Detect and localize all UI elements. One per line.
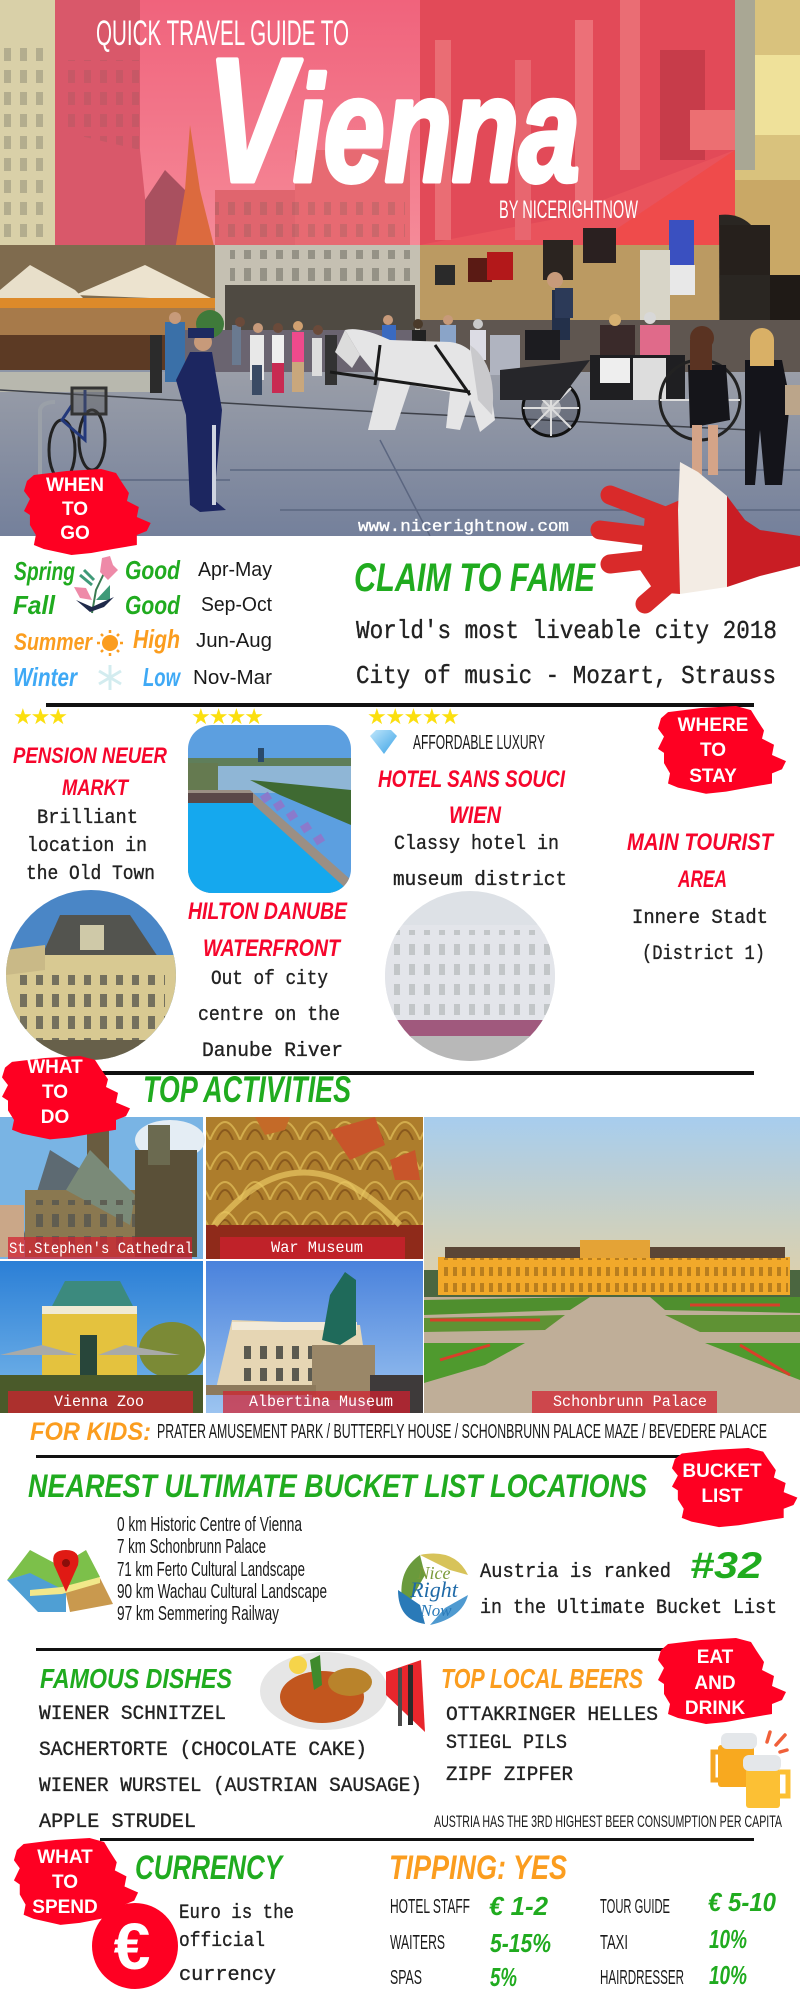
season: winter: Nov-Mar — [193, 667, 272, 689]
season: summer: Summer — [14, 629, 93, 656]
hotel: sans souci: WIEN — [449, 802, 502, 829]
hotel: sans souci: HOTEL SANS SOUCI — [378, 766, 566, 793]
badge: what to do: WHAT — [27, 1057, 83, 1078]
season: winter — [13, 662, 272, 692]
icon: euro coin — [92, 1903, 178, 1989]
title: Vienna: Vienna — [207, 23, 580, 219]
badge: bucket list: BUCKET — [682, 1461, 762, 1482]
panel: claim to fame — [354, 556, 777, 691]
hotel: hilton danube waterfront: Danube River — [202, 1040, 343, 1063]
panel: currency: CURRENCY — [135, 1849, 285, 1887]
hero photo: Vienna street with horse carriage — [0, 0, 800, 536]
hotel: hilton danube waterfront: Out of city — [211, 968, 328, 991]
seasons table — [13, 555, 272, 692]
panel: top local beers: STIEGL PILS — [446, 1732, 567, 1755]
panel: tipping: WAITERS — [390, 1932, 445, 1954]
panel: tipping: 10% — [709, 1960, 747, 1990]
icon: nice right now logo: Nice — [416, 1563, 450, 1583]
label — [8, 1237, 192, 1259]
panel: tipping: € 5-10 — [708, 1887, 776, 1917]
icon: nice right now logo: Right — [409, 1577, 459, 1602]
panel: tipping: 5-15% — [490, 1928, 551, 1958]
panel: currency: official — [179, 1930, 265, 1953]
for kids: FOR KIDS: — [30, 1418, 151, 1446]
hotel: pension neuer markt: location in — [27, 835, 147, 858]
badge: eat and drink: DRINK — [685, 1698, 745, 1719]
hotel: pension neuer markt: Brilliant — [37, 807, 138, 830]
badge: when to go: GO — [60, 523, 90, 544]
hotel: pension neuer markt: the Old Town — [26, 863, 155, 886]
badge: when to go — [24, 469, 151, 555]
photo grid: top activities — [0, 1117, 800, 1413]
panel: currency — [135, 1849, 294, 1987]
heading: top activities: TOP ACTIVITIES — [143, 1069, 351, 1110]
panel: top local beers: OTTAKRINGER HELLES — [446, 1704, 658, 1727]
panel: where to stay — [6, 705, 786, 1063]
parasols — [0, 265, 85, 300]
panel: tipping: 10% — [709, 1924, 747, 1954]
hotel: sans souci: Classy hotel in — [394, 833, 559, 856]
photo: pension building — [6, 890, 176, 1062]
season: winter: Low — [143, 662, 181, 692]
photo: schonbrunn palace — [424, 1117, 800, 1413]
panel: tipping: SPAS — [390, 1967, 422, 1989]
hotel: hilton danube waterfront: centre on the — [198, 1004, 340, 1027]
nearby bucket list locations — [117, 1514, 327, 1625]
police officer — [176, 328, 226, 512]
hotel: hilton danube waterfront: HILTON DANUBE — [188, 898, 348, 925]
season: spring: Good — [125, 555, 181, 585]
panel: tipping: TIPPING: YES — [389, 1849, 567, 1887]
austria ranking: Austria is ranked — [480, 1561, 671, 1584]
title: quick travel guide to: QUICK TRAVEL GUIDE TO — [96, 14, 349, 53]
panel: tipping: TOUR GUIDE — [600, 1896, 670, 1918]
panel: famous dishes: SACHERTORTE (CHOCOLATE CAKE) — [39, 1739, 367, 1762]
panel: famous dishes — [39, 1663, 422, 1834]
heading: CLAIM TO FAME — [354, 556, 596, 600]
shops band — [0, 245, 215, 298]
pavement — [0, 372, 800, 536]
photo: schonbrunn palace: Schonbrunn Palace — [553, 1393, 707, 1411]
hotel: sans souci — [367, 705, 567, 892]
icon: nice right now logo: Now — [419, 1601, 452, 1620]
badge: where to stay: TO — [700, 740, 726, 761]
photo: albertina museum: Albertina Museum — [249, 1393, 393, 1411]
hotel: pension neuer markt: PENSION NEUER — [13, 743, 167, 768]
panel: tipping: 5% — [490, 1962, 517, 1992]
season: summer — [14, 624, 272, 656]
photo: vienna zoo — [0, 1261, 205, 1413]
season: fall — [13, 590, 272, 620]
icon: euro coin: € — [114, 1909, 150, 1983]
badge: where to stay — [658, 706, 786, 794]
icon: beer mugs — [713, 1732, 788, 1808]
badge: what to do: DO — [41, 1107, 69, 1128]
austria ranking — [480, 1545, 777, 1620]
nearby bucket list locations: 7 km Schonbrunn Palace — [117, 1536, 266, 1558]
hotel: sans souci: ★★★★★ — [367, 705, 460, 730]
hotel: pension neuer markt — [13, 705, 167, 886]
panel: top local beers: TOP LOCAL BEERS — [441, 1663, 643, 1694]
carriage — [500, 355, 740, 440]
photo: albertina museum — [206, 1261, 423, 1413]
hotel: hilton danube waterfront: ★★★★ — [191, 705, 264, 730]
nearby bucket list locations: 97 km Semmering Railway — [117, 1603, 279, 1625]
badge: what to spend: TO — [52, 1872, 78, 1893]
two women — [688, 326, 800, 485]
icon: schnitzel plate — [260, 1652, 388, 1730]
main tourist area: Innere Stadt — [632, 907, 768, 930]
austria ranking: #32 — [690, 1545, 762, 1586]
badge: where to stay: WHERE — [678, 715, 748, 736]
badge: what to spend — [14, 1838, 138, 1925]
badge: bucket list — [672, 1448, 797, 1527]
season: spring — [14, 555, 272, 586]
nearby bucket list locations: 0 km Historic Centre of Vienna — [117, 1514, 303, 1536]
badge: when to go: WHEN — [46, 475, 104, 496]
panel: famous dishes: APPLE STRUDEL — [39, 1811, 196, 1834]
panel: tipping: € 1-2 — [489, 1891, 549, 1921]
austria ranking: in the Ultimate Bucket List — [480, 1597, 777, 1620]
icon: snowflake — [99, 665, 121, 690]
season: spring: Spring — [14, 556, 75, 586]
heading: nearest ultimate bucket list locations: NEAREST ULTIMATE BUCKET LIST LOCATIONS — [28, 1468, 648, 1504]
icon: sun — [97, 630, 123, 656]
season: summer: Jun-Aug — [196, 630, 272, 652]
season: fall: Fall — [13, 590, 56, 620]
badge: eat and drink: EAT — [697, 1647, 734, 1668]
nearby bucket list locations: 71 km Ferto Cultural Landscape — [117, 1559, 305, 1581]
photo: war museum ceiling — [206, 1117, 423, 1259]
panel: tipping — [389, 1849, 776, 1992]
icon: diamond — [370, 730, 397, 754]
season: winter: Winter — [13, 662, 78, 692]
season: fall: Good — [125, 590, 181, 620]
badge: eat and drink: AND — [694, 1673, 736, 1694]
crowd — [150, 272, 670, 395]
byline: BY NICERIGHTNOW — [499, 196, 638, 224]
icon: nice right now logo — [398, 1553, 470, 1625]
badge: where to stay: STAY — [689, 766, 737, 787]
label — [223, 1391, 410, 1413]
photo: hilton pool — [188, 725, 351, 893]
badge: what to do — [2, 1056, 130, 1139]
stars: ★★★ — [13, 705, 68, 730]
website url: www.nicerightnow.com — [358, 518, 569, 537]
panel: famous dishes: WIENER WURSTEL (AUSTRIAN SAUSAGE) — [39, 1775, 422, 1798]
badge: bucket list: LIST — [701, 1486, 743, 1507]
photo: st stephen's cathedral: St.Stephen's Cathedral — [9, 1240, 193, 1258]
panel: famous dishes: WIENER SCHNITZEL — [39, 1703, 226, 1726]
photo: st stephen's cathedral — [0, 1117, 205, 1259]
icon: flower — [74, 556, 118, 613]
badge: when to go: TO — [62, 499, 88, 520]
main tourist area: (District 1) — [642, 943, 765, 966]
hotel: hilton danube waterfront — [188, 705, 348, 1063]
icon: hand painted with Austrian flag — [600, 462, 800, 604]
horse — [330, 329, 495, 432]
nearby bucket list locations: 90 km Wachau Cultural Landscape — [117, 1581, 327, 1603]
photo: vienna zoo: Vienna Zoo — [54, 1393, 144, 1411]
icon: map with pin — [7, 1550, 113, 1612]
badge: what to spend: WHAT — [37, 1847, 93, 1868]
season: spring: Apr-May — [198, 559, 272, 581]
season: fall: Sep-Oct — [201, 594, 272, 616]
panel: tipping: TAXI — [600, 1932, 628, 1954]
hotel: sans souci: museum district — [393, 869, 567, 892]
badge: what to do: TO — [42, 1082, 68, 1103]
panel: currency: currency — [179, 1964, 276, 1987]
badge: eat and drink — [658, 1638, 786, 1724]
panel: top local beers: ZIPF ZIPFER — [446, 1764, 573, 1787]
panel: top local beers — [434, 1663, 782, 1831]
label — [220, 1237, 405, 1259]
panel: currency: Euro is the — [179, 1902, 294, 1925]
hotel: hilton danube waterfront: WATERFRONT — [203, 935, 342, 962]
main tourist area: AREA — [677, 866, 727, 893]
main tourist area — [627, 829, 775, 966]
photo: sans souci building — [385, 890, 556, 1062]
hotel: sans souci: AFFORDABLE LUXURY — [413, 732, 545, 754]
label — [8, 1391, 193, 1413]
for kids — [30, 1418, 767, 1446]
photo: war museum ceiling: War Museum — [271, 1239, 363, 1257]
panel: tipping: HOTEL STAFF — [390, 1896, 470, 1918]
panel: famous dishes: FAMOUS DISHES — [40, 1663, 232, 1694]
icon: napkin and cutlery — [386, 1660, 425, 1732]
bicycle — [40, 388, 106, 480]
panel: tipping: HAIRDRESSER — [600, 1967, 684, 1989]
badge: what to spend: SPEND — [32, 1897, 98, 1918]
label — [532, 1391, 717, 1413]
season: summer: High — [133, 624, 180, 654]
main tourist area: MAIN TOURIST — [627, 829, 775, 856]
hotel: pension neuer markt: MARKT — [62, 775, 129, 800]
